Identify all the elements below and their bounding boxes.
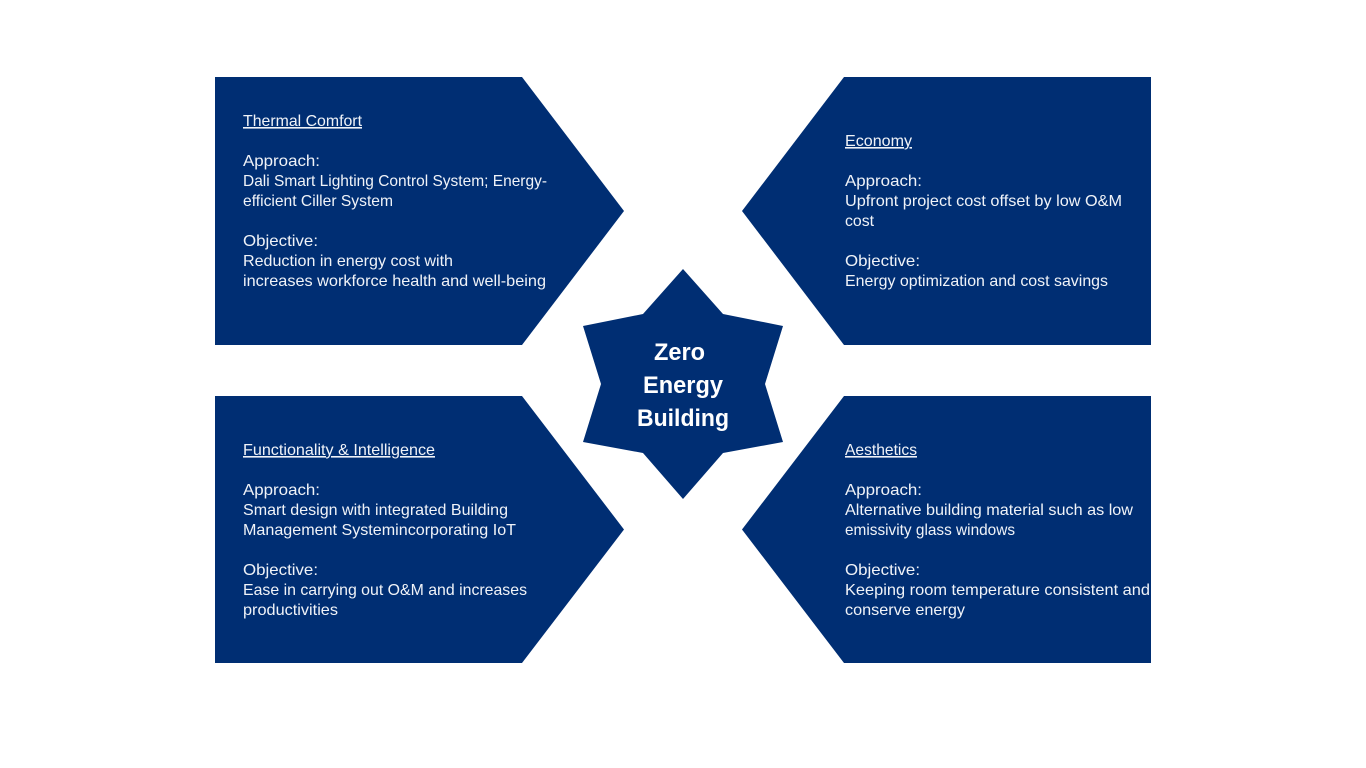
text block: thermal comfort details: Reduction in energy cost with <box>243 253 453 270</box>
panel: economy <box>742 77 1151 345</box>
text block: aesthetics details: Keeping room temperature consistent and <box>845 582 1150 599</box>
center title <box>637 339 729 432</box>
text block: functionality details: Management Systemincorporating IoT <box>243 522 516 539</box>
text block: thermal comfort details: efficient Ciller System <box>243 193 393 210</box>
text block: aesthetics details: conserve energy <box>845 602 965 619</box>
text block: thermal comfort details <box>243 153 547 290</box>
center title: Energy <box>643 372 724 399</box>
text block: functionality details: Smart design with integrated Building <box>243 502 508 519</box>
text block: functionality details: productivities <box>243 602 338 619</box>
text block: functionality details: Objective: <box>243 562 318 579</box>
panel: thermal comfort <box>215 77 624 345</box>
heading: functionality and intelligence: Functionality & Intelligence <box>243 442 435 459</box>
heading: aesthetics: Aesthetics <box>845 442 917 459</box>
text block: aesthetics details: Objective: <box>845 562 920 579</box>
text block: functionality details <box>243 482 527 619</box>
text block: economy details: Objective: <box>845 253 920 270</box>
text block: economy details: cost <box>845 213 875 230</box>
center title: Zero <box>654 339 705 366</box>
text block: thermal comfort details: Objective: <box>243 233 318 250</box>
text block: aesthetics details: emissivity glass windows <box>845 522 1015 539</box>
text block: thermal comfort details: Approach: <box>243 153 320 170</box>
text block: thermal comfort details: Dali Smart Lighting Control System; Energy- <box>243 173 547 190</box>
text block: functionality details: Approach: <box>243 482 320 499</box>
panel: functionality and intelligence <box>215 396 624 663</box>
heading: thermal comfort: Thermal Comfort <box>243 113 363 130</box>
text block: thermal comfort details: increases workforce health and well-being <box>243 273 546 290</box>
center star: zero energy building <box>583 269 783 499</box>
text block: aesthetics details: Approach: <box>845 482 922 499</box>
text block: functionality details: Ease in carrying out O&M and increases <box>243 582 527 599</box>
text block: aesthetics details: Alternative building material such as low <box>845 502 1133 519</box>
heading: economy: Economy <box>845 133 912 150</box>
text block: economy details: Approach: <box>845 173 922 190</box>
text block: economy details <box>845 173 1122 290</box>
text block: economy details: Upfront project cost offset by low O&M <box>845 193 1122 210</box>
center title: Building <box>637 405 729 432</box>
text block: aesthetics details <box>845 482 1150 619</box>
text block: economy details: Energy optimization and cost savings <box>845 273 1108 290</box>
panel: aesthetics <box>742 396 1151 663</box>
